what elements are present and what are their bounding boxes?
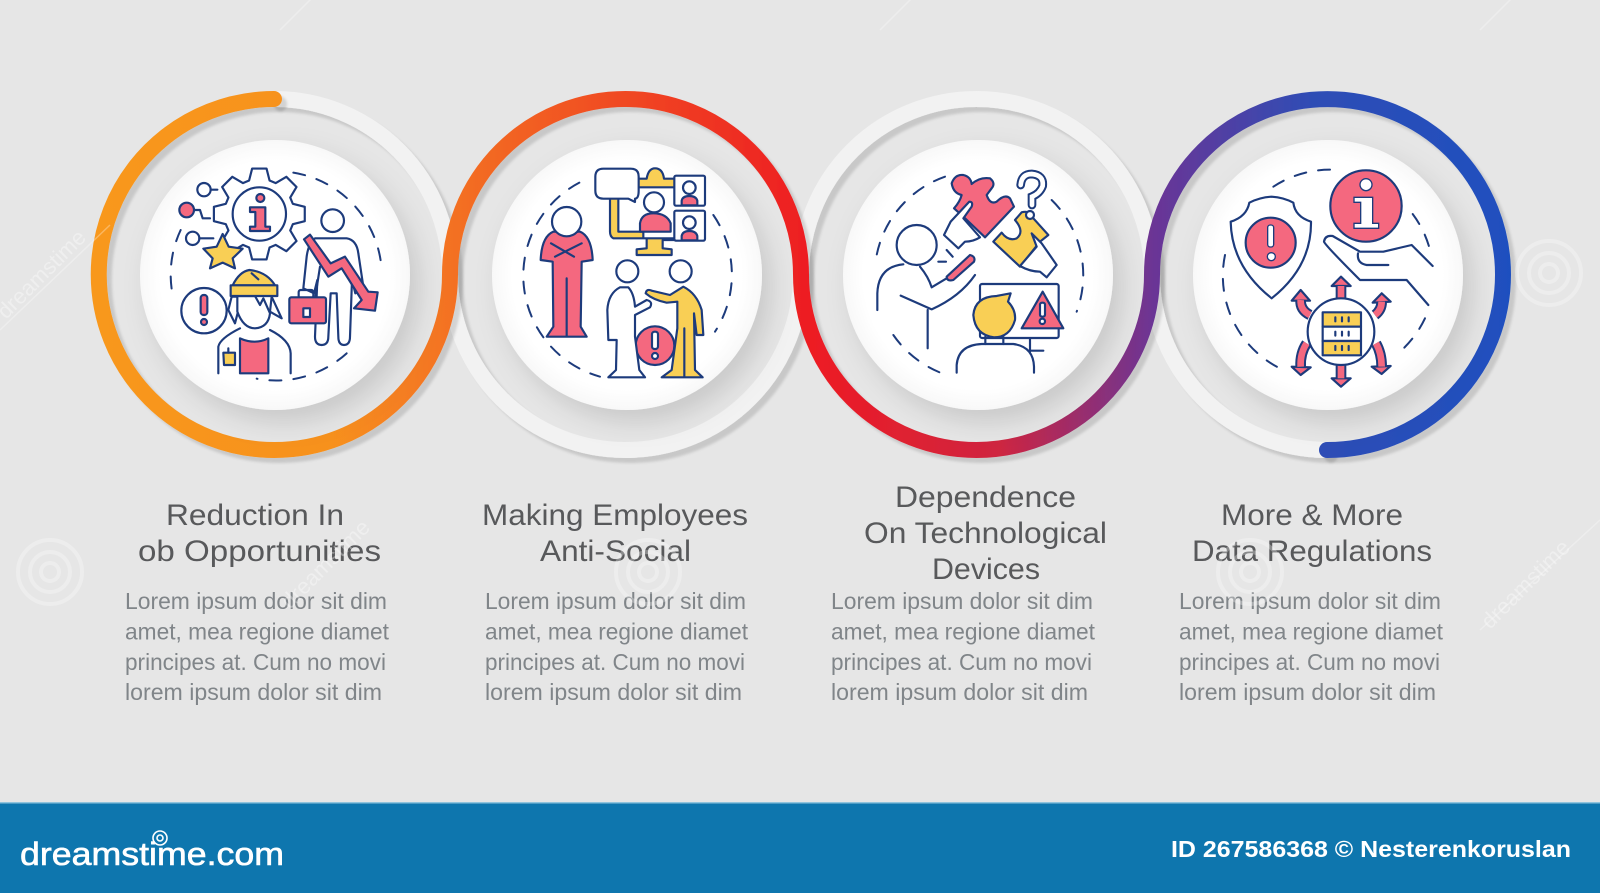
icon part: person pointing — [877, 225, 975, 348]
icon part: star — [203, 234, 243, 268]
text block: step 2: amet, mea regione diamet — [485, 618, 749, 644]
heading: step 3: Devices — [932, 553, 1040, 586]
text block: step 2: lorem ipsum dolor sit dim — [485, 679, 742, 705]
icon part: alert bubble — [181, 288, 227, 333]
ghost ribbon: complementary light S-curve — [277, 99, 1325, 450]
text block: step 3: amet, mea regione diamet — [831, 618, 1096, 644]
icon part: yellow puzzle piece with hand — [993, 212, 1057, 277]
icon part: walking employee — [303, 209, 363, 345]
icon part: briefcase — [289, 290, 326, 323]
icon: job reduction — [171, 169, 382, 380]
text block: step 3: lorem ipsum dolor sit dim — [831, 679, 1088, 705]
watermark spirals and marks — [0, 0, 1600, 630]
heading: step 2: Anti-Social — [540, 535, 691, 568]
icon part: open hand — [1324, 236, 1433, 305]
icon part: gear with info — [214, 169, 305, 259]
watermark words: dreamstime — [276, 515, 375, 614]
footer logo spiral — [153, 831, 167, 845]
watermark words — [0, 225, 1575, 634]
text block: step 2: Lorem ipsum dolor sit dim — [485, 588, 746, 614]
coloured ribbon: gradient S-curve through all four steps — [99, 99, 1503, 450]
icon part: info circle — [1330, 170, 1402, 242]
icon part: falling arrow — [304, 235, 378, 311]
text block: step 1: principes at. Cum no movi — [125, 649, 386, 675]
icon part: question mark — [1021, 174, 1043, 219]
footer credit: ID 267586368 © Nesterenkoruslan — [1171, 836, 1571, 862]
icon part: video call monitor — [595, 168, 705, 255]
text block: step 1: Lorem ipsum dolor sit dim — [125, 588, 387, 614]
heading: step 3: Dependence — [895, 481, 1076, 514]
white discs behind the icons — [140, 140, 1463, 410]
heading: step 2: Making Employees — [482, 499, 748, 532]
icon part: person at screen — [957, 293, 1034, 373]
text block: step 3: Lorem ipsum dolor sit dim — [831, 588, 1093, 614]
icon part: white figure — [607, 260, 651, 377]
watermark words: dreamstime — [1476, 535, 1575, 634]
icon part: shield with alert — [1231, 197, 1311, 298]
text block: step 1: amet, mea regione diamet — [125, 618, 390, 644]
icon: anti-social employees — [523, 168, 732, 377]
text block: step 4: principes at. Cum no movi — [1179, 649, 1440, 675]
footer bar — [0, 802, 1600, 893]
text block: step 4: Lorem ipsum dolor sit dim — [1179, 588, 1441, 614]
icon part: network nodes — [179, 183, 217, 245]
text block: step 3: principes at. Cum no movi — [831, 649, 1092, 675]
icon part: server — [1308, 298, 1374, 365]
icon part: alert circle between people — [636, 326, 674, 365]
heading: step 4: Data Regulations — [1192, 535, 1432, 568]
icon part: pink puzzle piece with hand — [944, 175, 1014, 248]
text block: step 4: amet, mea regione diamet — [1179, 618, 1444, 644]
heading: step 1: Reduction In — [166, 499, 344, 532]
heading: step 1: ob Opportunities — [138, 535, 381, 568]
icon part: figure with crossed arms — [541, 207, 593, 337]
footer logo: dreamstime.com — [20, 836, 284, 872]
text block: step 1: lorem ipsum dolor sit dim — [125, 679, 382, 705]
icon: dependence on devices — [875, 174, 1083, 375]
text block: step 4: lorem ipsum dolor sit dim — [1179, 679, 1436, 705]
icon part: outward arrows — [1292, 277, 1391, 387]
icon part: worker with cap — [218, 270, 291, 373]
text block: step 2: principes at. Cum no movi — [485, 649, 745, 675]
icon part: yellow figure — [646, 260, 703, 377]
heading: step 3: On Technological — [864, 517, 1107, 550]
icon: data regulations — [1223, 170, 1433, 387]
icon part: monitor with warning — [980, 284, 1063, 352]
heading: step 4: More & More — [1221, 499, 1403, 532]
